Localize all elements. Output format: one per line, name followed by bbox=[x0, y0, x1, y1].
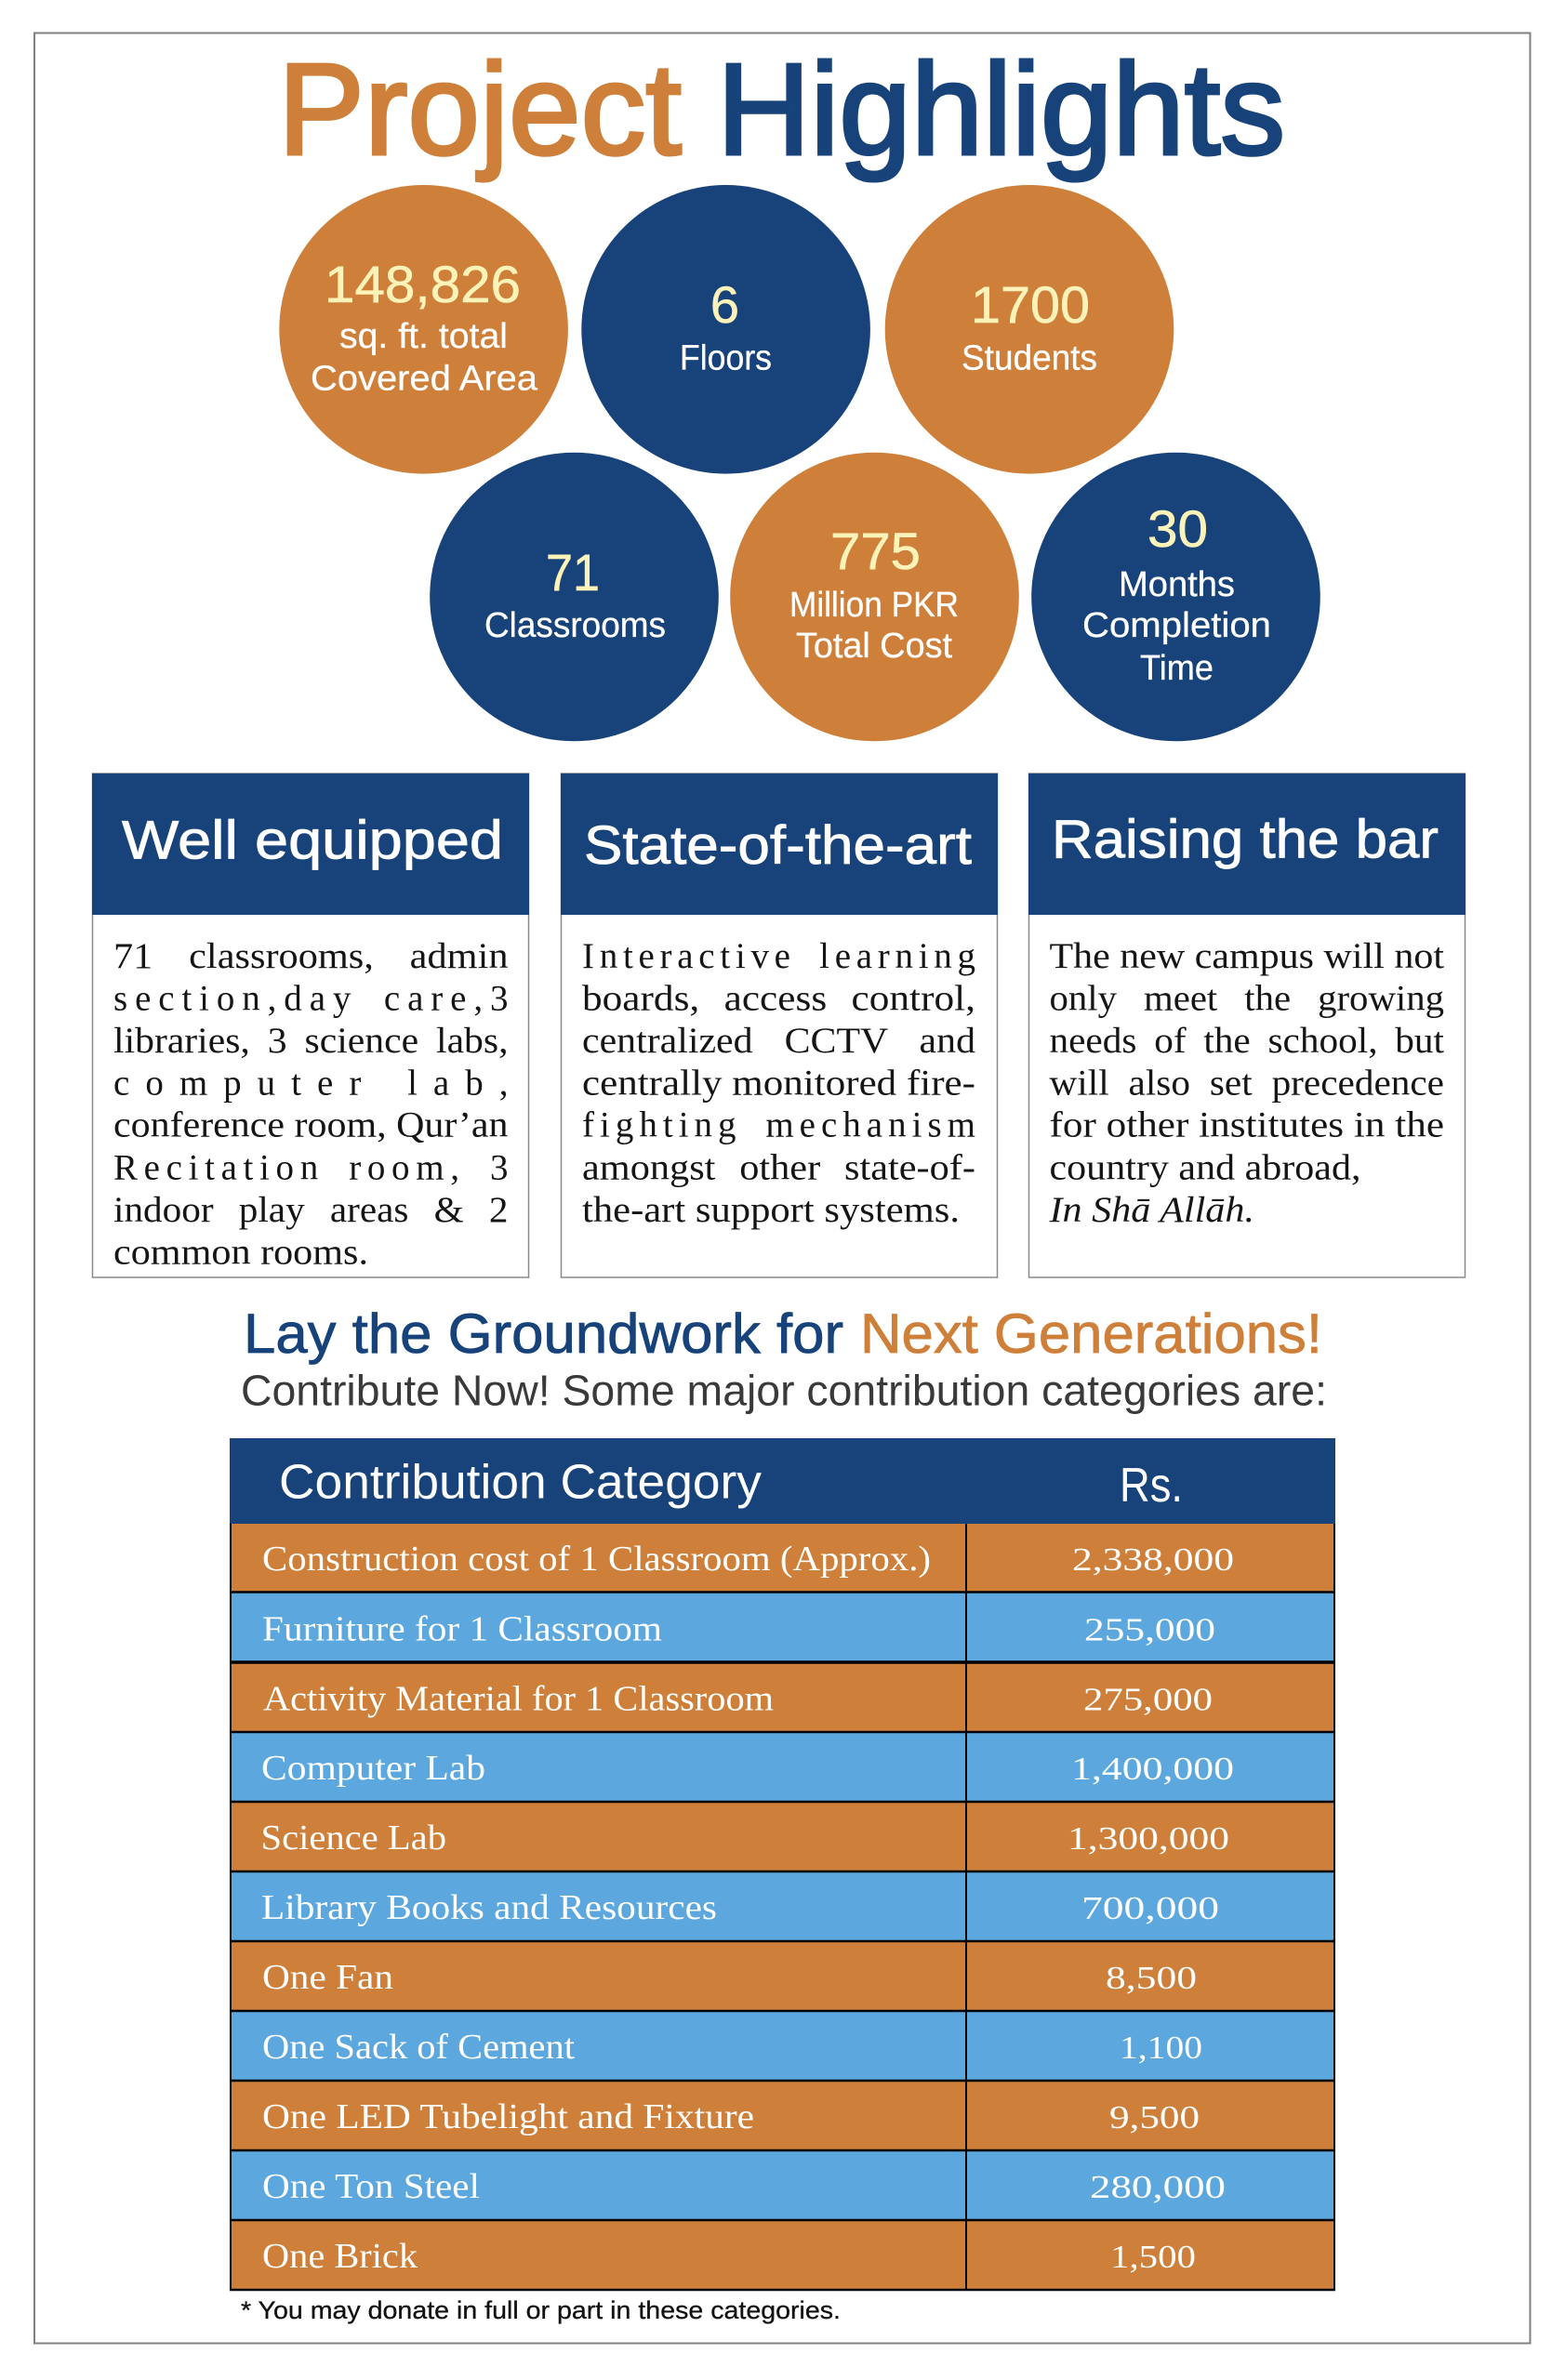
panel: raising the bar: will also set precedence bbox=[1049, 1064, 1444, 1103]
panel: well equipped: computer lab, bbox=[113, 1064, 508, 1103]
panel: state-of-the-art: State-of-the-art bbox=[584, 815, 972, 876]
panel: raising the bar: only meet the growing bbox=[1049, 978, 1444, 1019]
title bbox=[278, 36, 1285, 182]
table rows: Library Books and Resources bbox=[261, 1888, 717, 1927]
stat circle: total cost: 775 bbox=[830, 522, 921, 580]
table rows: 1,400,000 bbox=[1071, 1751, 1234, 1787]
panel: well equipped: section,day care,3 bbox=[113, 978, 508, 1019]
table rows: 255,000 bbox=[1084, 1612, 1215, 1647]
panel: state-of-the-art: fighting mechanism bbox=[582, 1104, 975, 1145]
panel: raising the bar: needs of the school, but bbox=[1049, 1021, 1444, 1061]
stat circle: students: Students bbox=[962, 338, 1097, 377]
table rows: 700,000 bbox=[1081, 1890, 1219, 1926]
panel: state-of-the-art: amongst other state-of- bbox=[582, 1147, 975, 1188]
panel: state-of-the-art: centrally monitored fire- bbox=[582, 1064, 975, 1103]
stat circle: completion time: Time bbox=[1140, 649, 1214, 688]
stat circle: covered area: 148,826 bbox=[325, 255, 521, 313]
stat circle: classrooms: Classrooms bbox=[484, 606, 666, 645]
panel: well equipped: indoor play areas & 2 bbox=[113, 1190, 508, 1230]
title: Project bbox=[278, 36, 682, 182]
stat circle: floors: 6 bbox=[710, 275, 739, 334]
table rows: 8,500 bbox=[1106, 1960, 1197, 1996]
subheading: Contribute Now! Some major contribution categories are: bbox=[241, 1367, 1327, 1415]
table rows: One Fan bbox=[262, 1958, 393, 1997]
panel: state-of-the-art: Interactive learning bbox=[582, 936, 975, 976]
table rows: 275,000 bbox=[1083, 1681, 1213, 1718]
table rows: One Sack of Cement bbox=[262, 2028, 575, 2067]
stat circle: floors bbox=[581, 185, 870, 474]
panel: state-of-the-art: centralized CCTV and bbox=[582, 1021, 976, 1061]
stat circle: classrooms bbox=[430, 453, 719, 741]
table rows: 1,500 bbox=[1110, 2239, 1196, 2275]
panel: well equipped: conference room, Qur’an bbox=[113, 1104, 508, 1145]
table rows bbox=[230, 1524, 1335, 2290]
stat circle: total cost: Million PKR bbox=[789, 586, 959, 625]
table rows: 9,500 bbox=[1109, 2099, 1200, 2135]
table header: Contribution Category bbox=[279, 1456, 762, 1510]
table header: Rs. bbox=[1120, 1459, 1183, 1513]
table rows: One LED Tubelight and Fixture bbox=[262, 2097, 754, 2136]
stat circle: floors: Floors bbox=[680, 338, 772, 377]
panel: raising the bar: Raising the bar bbox=[1052, 809, 1439, 870]
panel: raising the bar: for other institutes in the bbox=[1049, 1104, 1444, 1145]
table rows: One Brick bbox=[262, 2237, 418, 2276]
panel: state-of-the-art: the-art support systems. bbox=[582, 1190, 960, 1230]
panel: well equipped: common rooms. bbox=[113, 1233, 368, 1272]
contribution table bbox=[230, 1438, 1335, 2290]
panel: raising the bar: country and abroad, bbox=[1049, 1147, 1361, 1188]
panel: raising the bar: In Shā Allāh. bbox=[1048, 1190, 1254, 1230]
table rows: Construction cost of 1 Classroom (Approx.) bbox=[262, 1540, 931, 1579]
table rows: 1,100 bbox=[1120, 2030, 1202, 2066]
stat circle: total cost: Total Cost bbox=[796, 627, 952, 666]
table rows: 1,300,000 bbox=[1068, 1820, 1229, 1857]
panel: raising the bar: The new campus will not bbox=[1049, 936, 1444, 976]
table header bbox=[230, 1438, 1335, 1524]
table rows: Furniture for 1 Classroom bbox=[262, 1610, 662, 1649]
table rows: 2,338,000 bbox=[1072, 1541, 1234, 1578]
stat circle: students: 1700 bbox=[971, 275, 1090, 334]
panel: well equipped: Well equipped bbox=[122, 811, 503, 870]
stat circle: completion time: Completion bbox=[1082, 606, 1271, 645]
stat circle: completion time: 30 bbox=[1147, 499, 1208, 558]
table rows: Science Lab bbox=[260, 1818, 446, 1858]
title: Highlights bbox=[717, 36, 1285, 182]
table rows: Activity Material for 1 Classroom bbox=[263, 1679, 774, 1718]
panel: well equipped: libraries, 3 science labs, bbox=[113, 1021, 508, 1061]
table rows: 280,000 bbox=[1090, 2169, 1226, 2205]
stat circle: total cost bbox=[730, 453, 1019, 741]
stat circle: covered area bbox=[279, 185, 568, 474]
stat circle: completion time: Months bbox=[1119, 565, 1235, 604]
panel: raising the bar bbox=[1028, 774, 1466, 1277]
stat circle: classrooms: 71 bbox=[546, 543, 600, 602]
stat circle: completion time bbox=[1031, 453, 1320, 741]
table rows: Computer Lab bbox=[261, 1749, 485, 1788]
stat circle: covered area: sq. ft. total bbox=[339, 317, 508, 356]
table rows: One Ton Steel bbox=[262, 2167, 480, 2206]
panel: state-of-the-art bbox=[561, 774, 998, 1277]
heading: lay the groundwork: Lay the Groundwork for bbox=[244, 1302, 843, 1365]
stat circle: students bbox=[885, 185, 1174, 474]
panel: well equipped: 71 classrooms, admin bbox=[113, 936, 508, 976]
heading: lay the groundwork bbox=[244, 1302, 1322, 1365]
stat circle: covered area: Covered Area bbox=[311, 359, 538, 398]
panel: state-of-the-art: boards, access control, bbox=[582, 978, 975, 1019]
heading: lay the groundwork: Next Generations! bbox=[860, 1302, 1322, 1365]
panel: well equipped bbox=[92, 774, 529, 1277]
panel: well equipped: Recitation room, 3 bbox=[113, 1147, 508, 1188]
footnote: * You may donate in full or part in these categories. bbox=[241, 2296, 841, 2324]
